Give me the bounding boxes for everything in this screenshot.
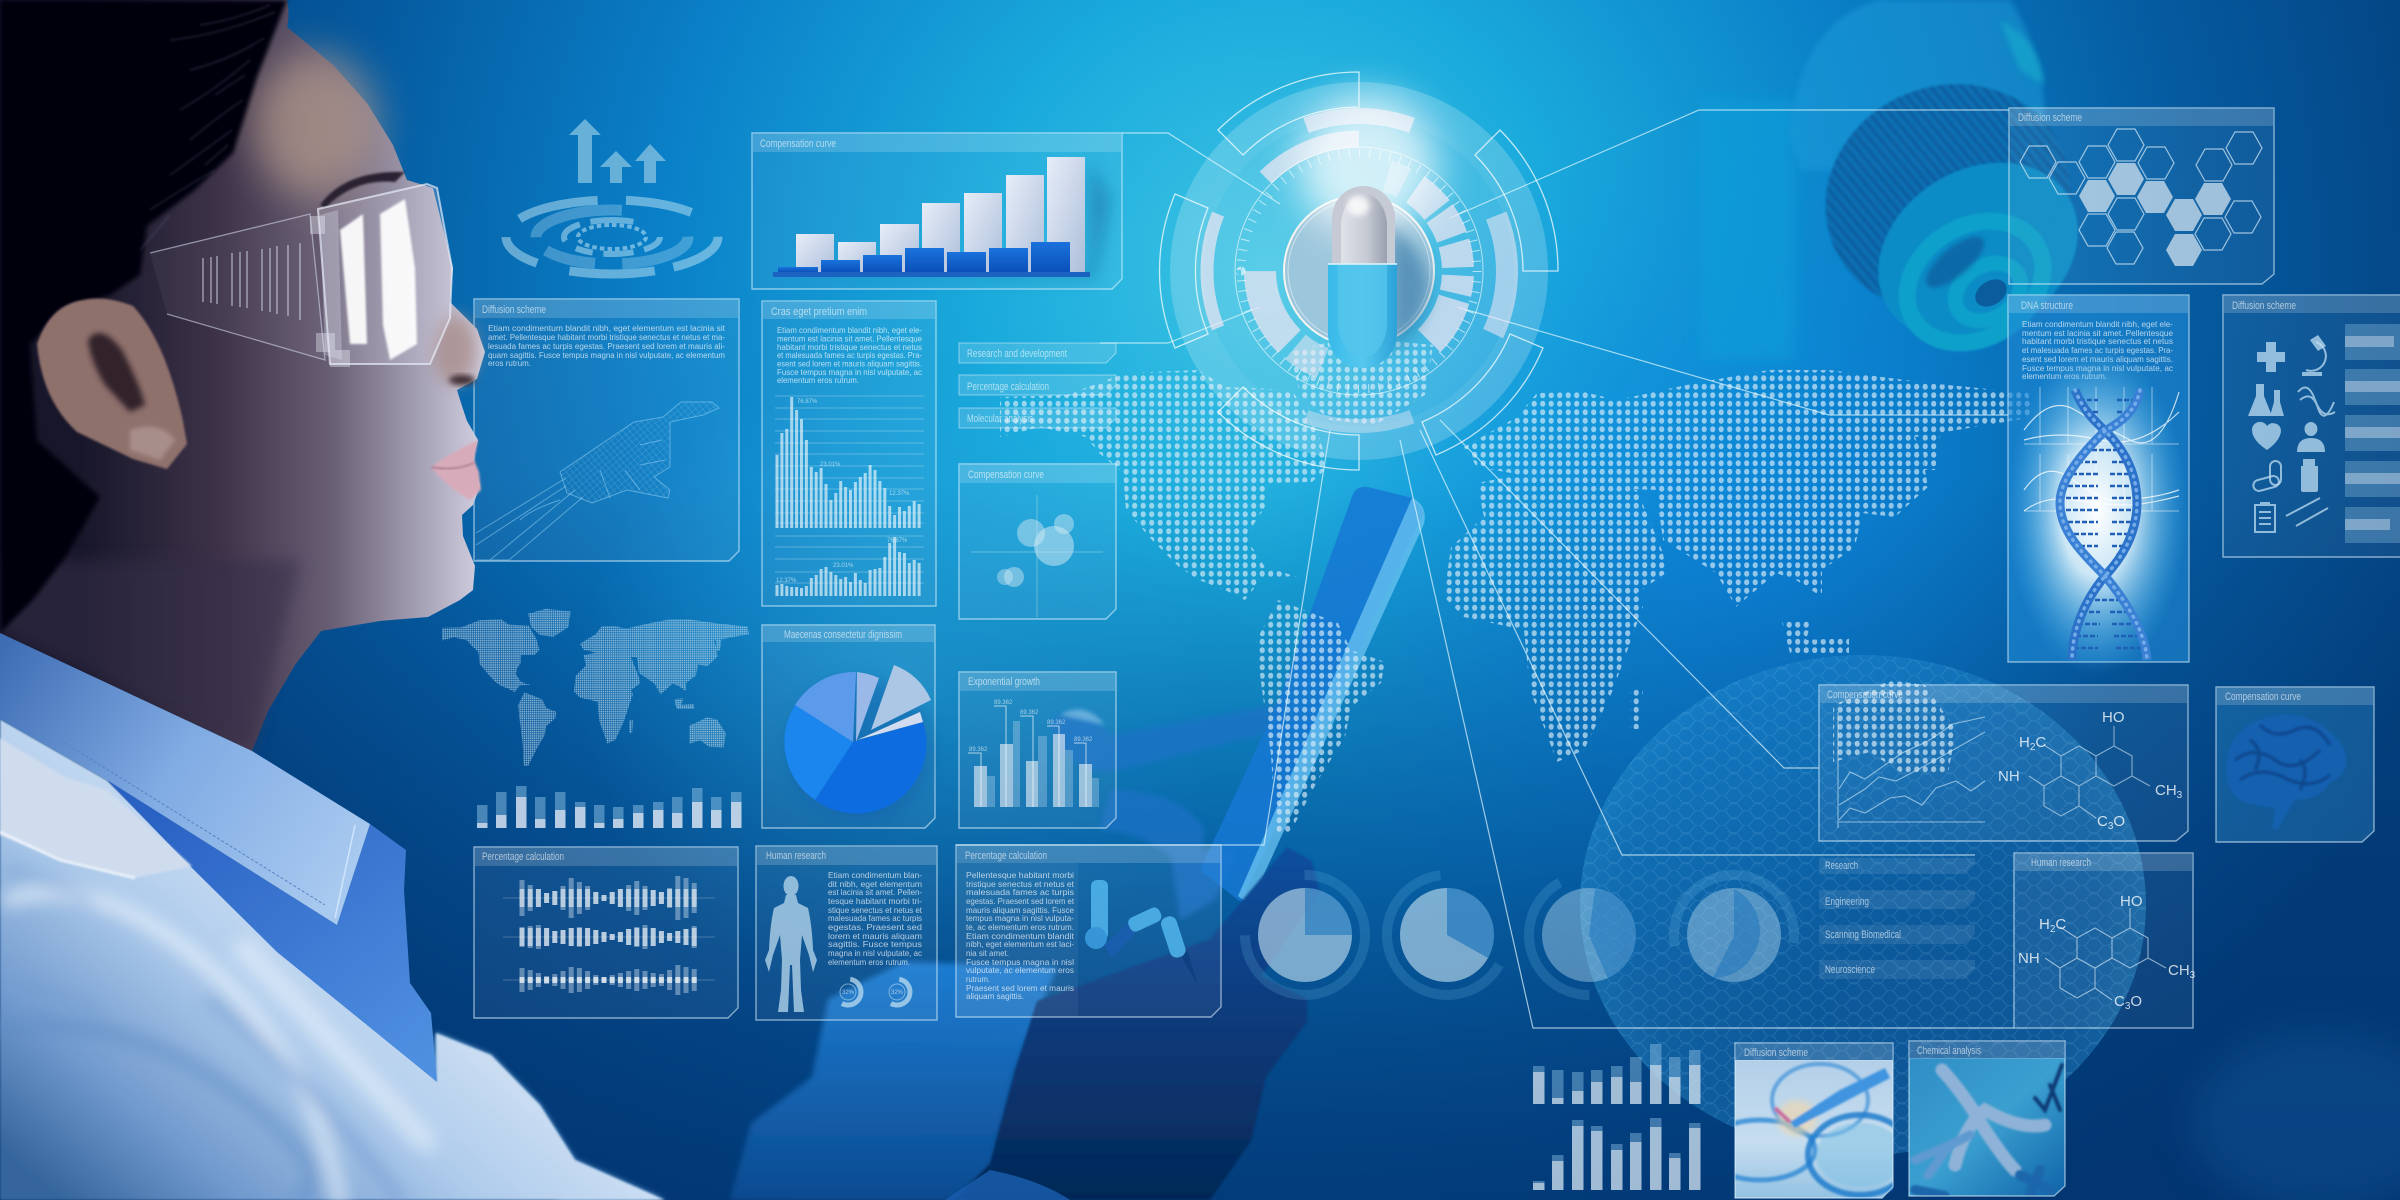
tab: neuroscience: Neuroscience	[1825, 964, 1875, 976]
molecule diagram: NH	[1998, 768, 2020, 785]
panel: compensation curve bar chart	[752, 133, 1122, 289]
panel: diffusion scheme petri dish	[1734, 1042, 1894, 1199]
molecule diagram: 3	[2125, 1001, 2131, 1012]
icon: clipboard	[2255, 503, 2275, 532]
hair strands	[140, 5, 275, 250]
tick ring	[1241, 153, 1477, 389]
neck shadow	[0, 560, 300, 751]
top glow	[1297, 95, 1437, 235]
molecule diagram: NH	[2018, 950, 2040, 967]
panel: exponential growth	[959, 672, 1116, 828]
bar chart: upper: 23.01%	[820, 462, 841, 468]
white lab coat	[0, 719, 665, 1200]
molecule diagram: O	[2113, 813, 2125, 830]
pie gauge 3	[1529, 875, 1649, 995]
body text: tristique senectus et netus et	[966, 879, 1075, 889]
cap opening	[1845, 126, 2111, 378]
molecule diagram: 3	[2177, 790, 2183, 801]
body text: Etiam condimentum blandit	[966, 931, 1075, 941]
tab: percentage calculation	[959, 375, 1116, 395]
capsule shadow	[1390, 225, 1430, 350]
body text: Fusce tempus magna in nisl vulputate, ac	[777, 367, 923, 377]
body text	[488, 323, 726, 368]
body text: egestas. Praesent sed	[828, 922, 922, 932]
bar chart: 89.362	[994, 700, 1013, 706]
body text: sagittis. Fusce tempus	[828, 939, 922, 949]
body text: te, ac elementum eros rutrum.	[966, 922, 1074, 932]
tab: percentage calculation: Percentage calculation	[967, 381, 1049, 393]
body text: rutrum.	[966, 974, 990, 984]
heading: Chemical analysis	[1917, 1045, 1981, 1057]
tab: engineering	[1819, 890, 1975, 909]
DNA helix	[2060, 390, 2147, 660]
body text: Pellentesque habitant morbi	[966, 870, 1074, 880]
icon: dna	[2298, 388, 2335, 416]
body text: tesque habitant morbi tri-	[828, 896, 922, 906]
lips	[431, 440, 481, 500]
heading: Diffusion scheme	[2232, 300, 2296, 312]
line graphs	[2024, 387, 2179, 511]
body text: Etiam condimentum blandit nibh, eget elementum est lacinia sit	[488, 323, 726, 333]
body text: vulputate, ac elementum eros	[966, 965, 1074, 975]
body text: quam sagittis. Fusce tempus magna in nisl vulputate, ac elementum	[488, 350, 725, 360]
bar chart: 89.362	[1020, 710, 1039, 716]
body text: malesuada fames ac turpis	[966, 887, 1074, 897]
panel: cras eget pretium enim	[762, 301, 936, 606]
donut gauges: 32%	[891, 990, 904, 996]
body text: Etiam condimentum blan-	[828, 870, 922, 880]
body text: esent sed lorem et mauris aliquam sagittis.	[777, 358, 922, 368]
icon: bottle	[2301, 459, 2318, 492]
body text: et malesuada fames ac turpis egestas. Pra-	[2022, 345, 2173, 355]
goggle clips	[310, 216, 350, 367]
chromosomes image	[1915, 1065, 2062, 1196]
body text: mentum est lacinia sit amet. Pellentesque	[777, 334, 922, 344]
panel: compensation curve brain	[2216, 687, 2374, 842]
goggle ribs	[203, 243, 300, 320]
molecule diagram: C	[2035, 734, 2046, 751]
bar chart: 89.362	[1074, 737, 1093, 743]
bar chart: lower: 76.87%	[887, 538, 908, 544]
molecule diagram: C	[2055, 916, 2066, 933]
body text: tempus magna in nisl vulputa-	[966, 913, 1074, 923]
pie gauge 2	[1365, 853, 1529, 1017]
goggle reflections	[340, 214, 367, 344]
body text	[2022, 319, 2174, 381]
panel: human research	[756, 846, 937, 1020]
ear	[37, 298, 187, 469]
panel: compensation curve with molecule	[1819, 685, 2188, 841]
body text: elementum eros rutrum.	[777, 375, 859, 385]
collar	[0, 633, 370, 925]
heading: Diffusion scheme	[1744, 1047, 1808, 1059]
molecule diagram: CH	[2155, 782, 2177, 799]
heading: Compensation curve	[968, 469, 1044, 481]
goggle lens	[318, 184, 452, 364]
stacked bars: bottom right upper	[1533, 1044, 1700, 1104]
safety goggles	[150, 184, 452, 367]
bar chart: lower	[775, 536, 924, 596]
bottle glow column	[1700, 100, 1795, 360]
heading: Compensation curve	[1827, 689, 1903, 701]
tab: research and development	[959, 343, 1116, 363]
capsule	[1328, 186, 1397, 368]
sleeve	[945, 1170, 1070, 1200]
neck and face	[0, 0, 485, 751]
molecule diagram: H	[2019, 734, 2030, 751]
body text: malesuada fames ac turpis	[828, 913, 922, 923]
molecule diagram: CH	[2168, 962, 2190, 979]
inner disc	[1284, 196, 1434, 346]
heading: Compensation curve	[2225, 691, 2301, 703]
pie chart	[784, 665, 932, 822]
body text: Praesent sed lorem et mauris	[966, 983, 1074, 993]
body text	[777, 325, 923, 385]
outer translucent ring	[1187, 99, 1531, 443]
tab: research and development: Research and development	[967, 348, 1067, 360]
capsule HUD	[1159, 72, 1558, 470]
body text: est lacinia sit amet. Pellen-	[828, 887, 922, 897]
body text: lesuada fames ac turpis egestas. Praesent sed lorem et mauris ali-	[488, 341, 725, 351]
hexagon outlines	[2020, 129, 2262, 264]
blue inner shirt	[107, 780, 437, 1082]
heading: Human research	[2031, 857, 2091, 869]
petri dishes image	[1735, 1061, 1893, 1198]
tab: scanning biomedical: Scanning Biomedical	[1825, 929, 1901, 941]
small world map	[442, 609, 749, 766]
waveform rows	[503, 876, 715, 995]
molecule diagram: HO	[2120, 893, 2142, 910]
body text: nibh, eget elementum est laci-	[966, 939, 1074, 949]
body text: magna in nisl vulputate, ac	[828, 948, 923, 958]
body text: habitant morbi tristique senectus et netus	[2022, 336, 2173, 346]
goggle arm	[150, 214, 325, 360]
panel: compensation curve bubble chart	[959, 464, 1116, 619]
molecule diagram	[2018, 893, 2196, 1012]
panel: maecenas pie chart	[762, 625, 935, 828]
horizontal bars	[2345, 324, 2400, 543]
body text: mauris aliquam sagittis. Fusce	[966, 905, 1074, 915]
molecule diagram: 2	[2050, 924, 2056, 935]
body text: habitant morbi tristique senectus et netus	[777, 342, 922, 352]
panel: diffusion scheme icons	[2223, 295, 2400, 557]
molecule diagram: HO	[2102, 709, 2124, 726]
bubble chart	[971, 495, 1103, 617]
body text: Fusce tempus magna in nisl	[966, 957, 1074, 967]
tab: scanning biomedical	[1819, 925, 1975, 944]
tab: research: Research	[1825, 860, 1858, 872]
hands holding tablet	[730, 487, 1425, 1200]
body text: nia sit amet.	[966, 948, 1009, 958]
connector lines	[956, 110, 2014, 1028]
pie gauge 1	[1245, 875, 1365, 995]
body text	[828, 870, 923, 967]
body text: stique senectus et netus et	[828, 905, 923, 915]
body text: et malesuada fames ac turpis egestas. Pra-	[777, 350, 922, 360]
nose tone	[433, 315, 477, 385]
body text: mentum est lacinia sit amet. Pellentesque	[2022, 328, 2173, 338]
bar chart: upper	[775, 396, 924, 528]
bar chart: upper: 76.87%	[797, 399, 818, 405]
body text: lorem et mauris aliquam	[828, 931, 922, 941]
icon: body silhouette	[765, 876, 817, 1012]
bar chart: lower: 12.37%	[776, 578, 797, 584]
forehead light	[253, 53, 377, 197]
body text: elementum eros rutrum.	[828, 957, 910, 967]
chart shadow	[780, 160, 1110, 278]
heading: Maecenas consectetur dignissim	[784, 629, 902, 641]
panel: human research molecule	[2014, 853, 2196, 1028]
coat lapel	[0, 738, 192, 878]
icon: medical cross	[2257, 342, 2285, 372]
panel: DNA structure	[2007, 295, 2189, 676]
heading: Percentage calculation	[965, 850, 1047, 862]
panel: percentage calculation waveforms	[474, 847, 738, 1018]
left hand	[730, 962, 1057, 1200]
body text: elementum eros rutrum.	[2022, 371, 2107, 381]
icon: microscope	[2302, 335, 2326, 376]
tab: research	[1819, 858, 1975, 874]
fingers and stylus	[1050, 703, 1285, 920]
heading: Compensation curve	[760, 138, 836, 150]
panel: percentage calculation with robot arm	[956, 845, 1221, 1017]
icon: pills	[2252, 461, 2281, 492]
woman scientist	[0, 0, 665, 1200]
body text: Fusce tempus magna in nisl vulputate, ac	[2022, 363, 2174, 373]
hexagons filled	[2079, 163, 2231, 266]
tabs: research categories	[1819, 858, 1975, 979]
body text: Etiam condimentum blandit nibh, eget ele-	[2022, 319, 2173, 329]
pale sector bands	[1160, 72, 1558, 470]
body text: esent sed lorem et mauris aliquam sagittis.	[2022, 354, 2173, 364]
panel: chemical analysis chromosomes	[1909, 1041, 2065, 1196]
tab: neuroscience	[1819, 960, 1975, 979]
body text: dit nibh, eget elementum	[828, 879, 922, 889]
pie gauges row	[1245, 853, 1804, 1017]
teal spiral rings	[1884, 196, 2066, 368]
panel: diffusion scheme with robot hand	[474, 299, 739, 561]
glow	[2007, 346, 2187, 676]
world map: large dotted	[1000, 337, 2034, 833]
coat folds	[0, 870, 425, 1200]
tab: molecular analysis: Molecular analysis	[967, 413, 1033, 425]
body text: egestas. Praesent sed lorem et	[966, 896, 1075, 906]
icon: brain	[2226, 715, 2346, 830]
eyebrow	[320, 172, 405, 208]
line chart	[1838, 712, 1985, 828]
molecule diagram: C	[2114, 993, 2125, 1010]
molecule diagram: 2	[2030, 742, 2036, 753]
icon: flasks	[2248, 384, 2284, 416]
donut gauges	[833, 977, 912, 1007]
bar chart	[968, 700, 1099, 807]
body text	[966, 870, 1075, 1001]
stacked bar strip: left	[477, 786, 742, 828]
icon: doctor	[2297, 422, 2325, 452]
heading: Exponential growth	[968, 676, 1040, 688]
glow disc	[1204, 116, 1514, 426]
panel: diffusion scheme hexagons	[2009, 108, 2274, 284]
molecule diagram: C	[2097, 813, 2108, 830]
tablet	[1200, 487, 1424, 902]
molecule diagram	[1998, 709, 2183, 832]
heading: Cras eget pretium enim	[771, 306, 867, 318]
tab: molecular analysis	[959, 408, 1116, 428]
bar chart: upper: 12.37%	[889, 491, 910, 497]
pie gauge 4	[1664, 865, 1804, 1005]
shoulder glow	[430, 1033, 665, 1200]
bar chart: 89.362	[969, 747, 988, 753]
bar chart: 89.362	[1047, 720, 1066, 726]
molecule diagram: 3	[2108, 821, 2114, 832]
wireframe robot hand	[476, 402, 719, 560]
molecule diagram: O	[2130, 993, 2142, 1010]
donut gauges: 32%	[842, 990, 855, 996]
blurred lab bottle in background	[1700, 0, 2111, 378]
elliptical HUD rings	[506, 200, 718, 274]
heading: Percentage calculation	[482, 851, 564, 863]
3D bars	[773, 157, 1090, 277]
body text: aliquam sagittis.	[966, 991, 1024, 1001]
body text: amet. Pellentesque habitant morbi tristique senectus et netus et ma-	[488, 332, 725, 342]
icon: heart	[2252, 422, 2281, 450]
heading: Diffusion scheme	[482, 304, 546, 316]
body text: Etiam condimentum blandit nibh, eget ele-	[777, 325, 922, 335]
body text: eros rutrum.	[488, 358, 531, 368]
hair	[0, 0, 287, 633]
outlined arc segments	[1159, 72, 1558, 470]
nostril	[449, 375, 475, 385]
stacked bars: bottom right lower	[1533, 1118, 1700, 1190]
tab: engineering: Engineering	[1825, 896, 1869, 908]
heading: Diffusion scheme	[2018, 112, 2082, 124]
bottle upper body	[1790, 0, 2044, 170]
arrows up	[569, 119, 666, 183]
molecule diagram: 3	[2190, 970, 2196, 981]
right hand	[955, 847, 1320, 1200]
bar chart: lower: 23.01%	[833, 563, 854, 569]
robot arm	[1085, 880, 1198, 985]
molecule diagram: H	[2039, 916, 2050, 933]
heading: DNA structure	[2021, 300, 2073, 312]
virus sphere	[1580, 655, 2146, 1155]
heading: Human research	[766, 850, 826, 862]
ridged cap	[1791, 48, 2105, 348]
icon: syringe	[2286, 498, 2328, 526]
